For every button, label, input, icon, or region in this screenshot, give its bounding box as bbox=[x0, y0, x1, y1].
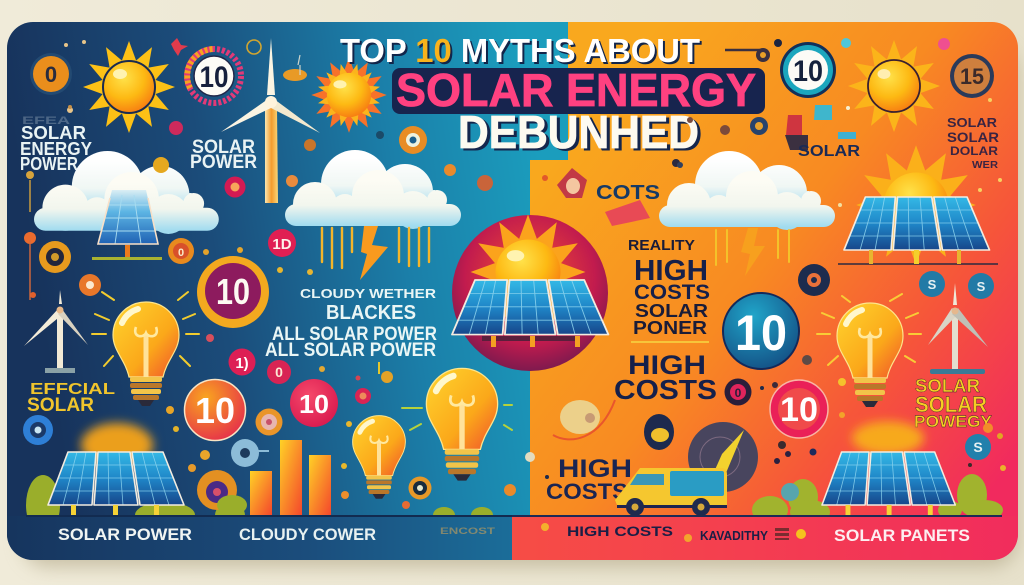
title line three: DEBUNHED bbox=[458, 106, 699, 158]
rain: right bbox=[716, 230, 789, 265]
text: high costs lower: HIGH bbox=[558, 455, 632, 483]
badges: small right: 0 bbox=[735, 386, 742, 400]
icons: small top right shapes bbox=[720, 38, 950, 150]
badge: red 10: 10 bbox=[780, 391, 818, 429]
badges: small right: S bbox=[973, 439, 983, 455]
icon: cream blob bbox=[553, 400, 615, 439]
icon: blue-grey ring bbox=[231, 439, 269, 467]
title bbox=[340, 32, 765, 160]
text: solar solar dolar: SOLAR bbox=[947, 115, 998, 130]
text: reality high costs solar poner: SOLAR bbox=[635, 301, 708, 321]
text: solar solar powegy: SOLAR bbox=[915, 376, 980, 396]
panel: reality side bbox=[530, 22, 1018, 560]
title line one: TOP 10 MYTHS ABOUT bbox=[340, 32, 700, 69]
bar chart bbox=[250, 440, 331, 515]
solar panel: top right bbox=[838, 197, 998, 264]
badge: 15 bbox=[950, 54, 994, 98]
hills: bottom left bbox=[26, 475, 493, 515]
footer text: kavadithy: KAVADITHY bbox=[700, 528, 768, 543]
text: solar energy power: POWER bbox=[20, 154, 78, 174]
wind turbine: right bbox=[928, 283, 988, 374]
lightbulb: left bbox=[113, 302, 179, 406]
badge: big blue 10: 10 bbox=[735, 305, 787, 361]
text: solar solar dolar: DOLAR bbox=[950, 144, 998, 158]
badges: small right: S bbox=[928, 277, 937, 292]
text: reality high costs solar poner bbox=[628, 237, 710, 338]
icon: blue ring bbox=[23, 415, 53, 445]
icon: cost shape bbox=[557, 168, 587, 198]
title line two: SOLAR ENERGY bbox=[396, 64, 756, 116]
text: high costs lower bbox=[546, 455, 632, 504]
text: solar energy power: EFEA bbox=[22, 115, 70, 127]
sun: top right bbox=[848, 40, 940, 132]
badge: 10 ringed bbox=[187, 49, 241, 103]
lightbulb: small center bbox=[353, 416, 405, 499]
badges: 10 cluster: 0 bbox=[275, 364, 283, 380]
text: reality high costs solar poner: COSTS bbox=[634, 281, 710, 304]
text: cloudy weather block: CLOUDY WETHER bbox=[300, 286, 437, 301]
text: solar solar dolar: SOLAR bbox=[947, 129, 999, 145]
bulb glow rays: left bbox=[92, 292, 199, 366]
text: high costs bbox=[614, 350, 717, 405]
badge: big 10 maroon: 10 bbox=[216, 271, 250, 312]
badge: 15: 15 bbox=[960, 64, 984, 89]
badge: orange zero bbox=[30, 53, 72, 95]
footer text: cloudy cower: CLOUDY COWER bbox=[239, 525, 376, 544]
text: high costs lower: COSTS bbox=[546, 479, 628, 504]
blob: red fan bbox=[605, 200, 650, 226]
rain: center left bbox=[322, 228, 429, 268]
badges: small top left: 0 bbox=[178, 247, 184, 259]
badges: small top left: 1D bbox=[272, 236, 292, 253]
glow behind bottom-right panel bbox=[852, 421, 924, 455]
bulb glow rays: right bbox=[817, 294, 921, 365]
text: cloudy weather block bbox=[265, 286, 437, 361]
confetti: left bbox=[24, 40, 493, 509]
text: solar: SOLAR bbox=[798, 143, 860, 160]
footer text: faded: ENCOST bbox=[440, 526, 496, 536]
text: cots: COTS bbox=[596, 182, 660, 204]
text: solar solar powegy: SOLAR bbox=[915, 392, 987, 417]
sun: behind right panel bbox=[856, 145, 976, 265]
badges: 10 cluster: 10 bbox=[299, 389, 329, 419]
footer text: solar power: SOLAR POWER bbox=[58, 525, 192, 544]
badges: small top left bbox=[39, 38, 427, 296]
lightbulb: right bbox=[837, 303, 903, 407]
text: solar power: POWER bbox=[190, 152, 257, 173]
text: efficial solar: SOLAR bbox=[27, 395, 94, 416]
bulb glow rays: center bbox=[402, 405, 512, 430]
panel: myth side bbox=[0, 0, 568, 585]
text: efficial solar: EFFCIAL bbox=[30, 381, 115, 398]
text: reality high costs solar poner: PONER bbox=[633, 318, 707, 338]
lightbulb: big center bbox=[426, 368, 498, 481]
footer text: high costs: HIGH COSTS bbox=[567, 523, 673, 539]
footer strip left bbox=[7, 517, 512, 560]
text: solar solar dolar: WER bbox=[972, 160, 999, 171]
badge: 10 teal ring bbox=[780, 42, 836, 98]
text: solar solar powegy bbox=[914, 376, 993, 431]
badges: 10 cluster: 10 bbox=[195, 390, 235, 431]
icon: dark face bbox=[644, 414, 674, 450]
text: efficial solar bbox=[27, 381, 115, 416]
cloud: right bbox=[659, 151, 835, 230]
footer text: solar panets: SOLAR PANETS bbox=[834, 526, 970, 545]
badges: small right: S bbox=[977, 279, 986, 294]
text: solar energy power: SOLAR bbox=[21, 123, 86, 143]
wind turbine: small left bbox=[24, 290, 88, 373]
icon: small stripes bbox=[775, 528, 789, 540]
text: solar energy power bbox=[20, 115, 92, 174]
badges: 10 cluster: 1) bbox=[235, 355, 249, 372]
lightning bolt bbox=[360, 226, 388, 280]
badges: 10 cluster bbox=[184, 348, 432, 515]
cloud: center left bbox=[285, 150, 461, 229]
badge: big blue 10 bbox=[723, 293, 799, 369]
center halo with sun and panel bbox=[452, 214, 608, 371]
sun: orange-red bbox=[310, 56, 388, 134]
text: reality high costs solar poner: REALITY bbox=[628, 237, 695, 254]
text: solar solar dolar bbox=[947, 115, 999, 171]
text: cloudy weather block: BLACKES bbox=[326, 302, 416, 324]
text: solar energy power: ENERGY bbox=[20, 139, 92, 159]
badge: orange zero: 0 bbox=[45, 62, 57, 87]
icon: dark dial with bolt bbox=[688, 422, 758, 492]
text: solar power bbox=[190, 137, 257, 173]
text: reality high costs solar poner: HIGH bbox=[634, 255, 708, 287]
text: solar power: SOLAR bbox=[192, 137, 255, 158]
title line one: TOP 10 MYTHS ABOUT bbox=[342, 34, 702, 71]
badge: big 10 maroon bbox=[197, 256, 269, 328]
glow behind bottom-left panel bbox=[81, 423, 153, 467]
footer strip right bbox=[512, 517, 1018, 560]
sun: top left bbox=[83, 41, 175, 133]
lightning bolt: right bbox=[741, 228, 765, 276]
text: cloudy weather block: ALL SOLAR POWER bbox=[265, 340, 436, 361]
badge: 10 ringed: 10 bbox=[200, 61, 228, 94]
text: high costs: COSTS bbox=[614, 374, 717, 405]
badge: red 10 bbox=[770, 380, 828, 438]
van bbox=[615, 468, 727, 516]
text: high costs: HIGH bbox=[628, 350, 706, 380]
text: cloudy weather block: ALL SOLAR POWER bbox=[272, 324, 437, 345]
text: solar solar powegy: POWEGY bbox=[914, 412, 993, 431]
solar panel: bottom right bbox=[822, 452, 955, 515]
confetti: right bbox=[504, 98, 1006, 542]
badges: small right bbox=[724, 264, 994, 460]
title line three: DEBUNHED bbox=[461, 108, 702, 160]
badge: 10 teal ring: 10 bbox=[793, 55, 823, 88]
cloud: left bbox=[34, 151, 219, 234]
solar panel: in cloud bbox=[92, 190, 162, 260]
solar panel: bottom left bbox=[48, 452, 184, 515]
wind turbine: large bbox=[221, 38, 320, 203]
hills: bottom right bbox=[752, 474, 1003, 515]
